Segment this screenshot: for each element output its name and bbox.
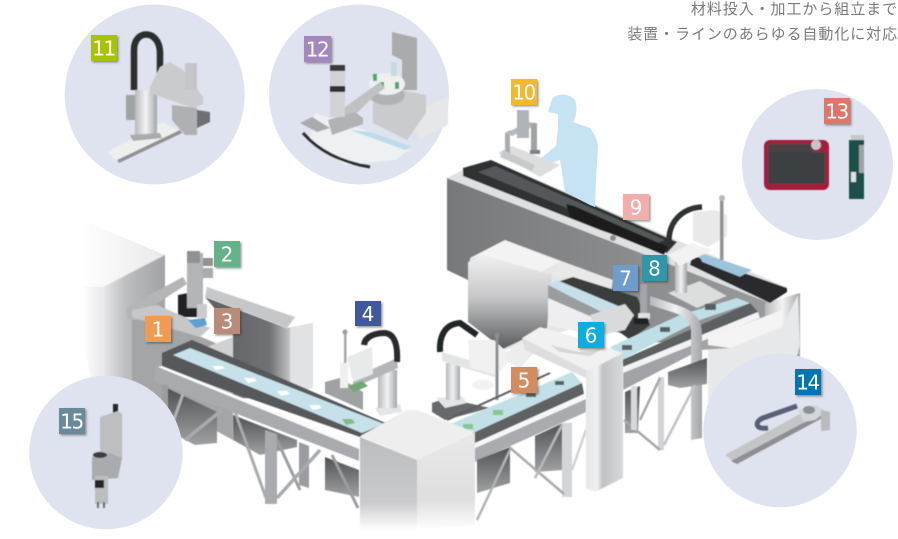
circle 13: controller products (742, 89, 893, 240)
right conveyor (610, 295, 800, 420)
lower right conveyor legs (477, 423, 586, 520)
left conveyor legs (162, 385, 358, 508)
circle 11: SCARA robot product (65, 4, 245, 184)
badge 3: 3 (221, 310, 233, 334)
badge 13: 13 (825, 100, 848, 124)
badge 8 (642, 255, 667, 281)
badge 6 (578, 322, 604, 348)
station 7 and 8 press unit (634, 284, 650, 324)
SCARA robot 5 (432, 323, 550, 420)
badge 3 (214, 308, 240, 334)
badge 2 (214, 241, 240, 267)
badge 1 (145, 316, 171, 342)
circle 14: linear axis product (703, 354, 857, 507)
title text: 材料投入・加工から組立まで (691, 0, 898, 18)
servo driver (849, 135, 864, 199)
dark support blocks under left conveyor (167, 388, 359, 497)
left wall fade (82, 286, 103, 400)
right conveyor frame legs (624, 358, 707, 450)
back-right cabinet with linear rail (447, 160, 800, 360)
badge 12: 12 (306, 38, 328, 62)
pillar under station 6 (522, 327, 623, 492)
left conveyor (155, 340, 388, 461)
item 10 desktop gantry (498, 110, 560, 177)
circle 15: electric cylinder product (29, 376, 183, 529)
gantry robot 1-3 (127, 251, 295, 337)
badge 11: 11 (92, 36, 115, 60)
left top face (82, 220, 165, 290)
badge 15: 15 (60, 410, 83, 434)
SCARA robot 9 with slider (668, 195, 752, 308)
circle 12: rotary table and actuator (269, 4, 449, 184)
badge 10: 10 (512, 80, 535, 104)
badge 8: 8 (648, 256, 661, 280)
badge 6: 6 (585, 324, 597, 348)
badge 7: 7 (619, 266, 632, 290)
badge 5 (511, 367, 537, 393)
badge 4 (355, 301, 381, 326)
badge 9 (623, 194, 649, 220)
worker silhouette (541, 95, 598, 207)
touch panel teaching pendant (764, 140, 829, 190)
lower right conveyor (448, 372, 586, 462)
badge 9: 9 (630, 196, 642, 220)
badge 2: 2 (221, 242, 233, 266)
badge 5: 5 (518, 368, 530, 392)
arch pillar (650, 296, 702, 440)
title text: 装置・ラインのあらゆる自動化に対応 (627, 26, 898, 43)
badge 1: 1 (152, 318, 164, 342)
white machine block (station 6) (468, 240, 650, 350)
SCARA robot 4 (325, 330, 402, 416)
badge 14: 14 (796, 370, 819, 394)
left machine cabinet (103, 255, 313, 440)
badge 4: 4 (362, 302, 374, 326)
title text (627, 0, 898, 43)
central corner block (360, 410, 475, 530)
badge 7 (613, 265, 638, 291)
